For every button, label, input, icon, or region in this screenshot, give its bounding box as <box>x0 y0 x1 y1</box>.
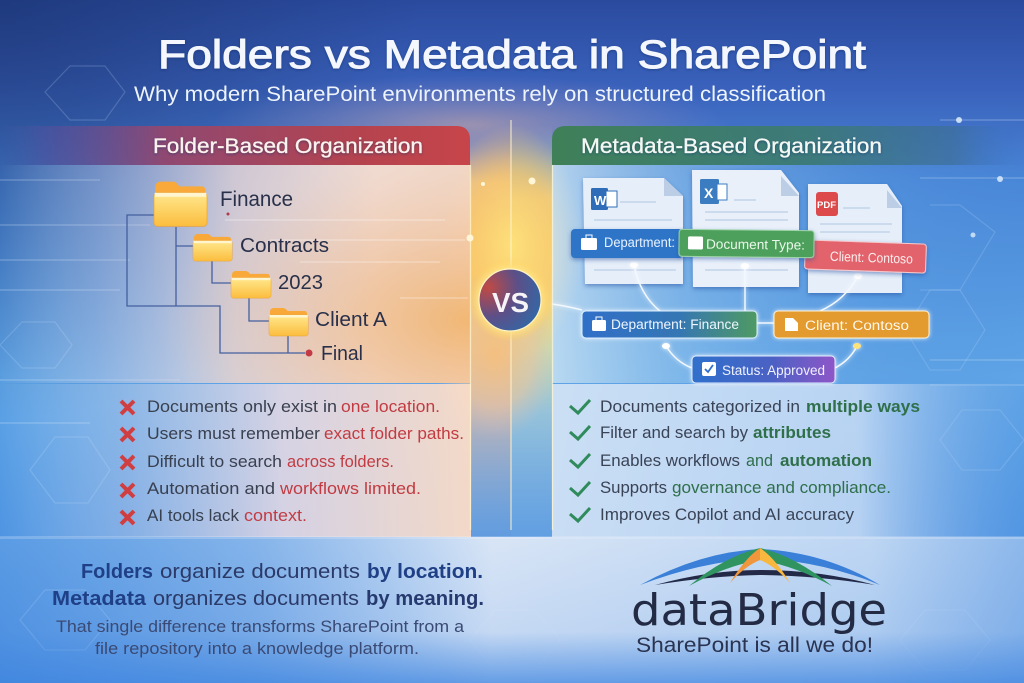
panel body: metadata list <box>552 384 1024 537</box>
tag: department finance: Department: Finance <box>611 317 739 332</box>
logo: tagline: SharePoint is all we do! <box>636 633 873 657</box>
label: finance: Finance <box>220 188 293 211</box>
supporting sentence: That single difference transforms SharePoint from a <box>56 617 465 636</box>
panel body: folder upper <box>0 165 470 383</box>
vs badge: VS <box>492 287 529 318</box>
line: folders by location: Folders <box>81 560 153 583</box>
document: pdf: PDF <box>817 200 836 211</box>
row 5: context. <box>244 506 307 525</box>
tag: status approved <box>692 356 835 383</box>
panel header bar: folder <box>0 126 470 165</box>
tag: client contoso orange: Client: Contoso <box>805 318 909 333</box>
document: pdf <box>808 184 902 293</box>
vs badge <box>468 258 552 342</box>
tag: client contoso red: Client: Contoso <box>830 249 913 267</box>
metadata benefits list <box>570 398 920 524</box>
subtitle: Why modern SharePoint environments rely on structured classification <box>134 82 826 106</box>
document: excel <box>692 170 799 287</box>
line: metadata by meaning: by meaning. <box>366 587 484 610</box>
row 3: and <box>746 452 773 470</box>
glow lower <box>433 270 557 440</box>
label: contracts: Contracts <box>240 235 329 257</box>
panel streaks <box>225 220 468 298</box>
row 3: automation <box>780 452 872 470</box>
row 1 <box>600 398 920 416</box>
supporting sentence: file repository into a knowledge platform. <box>95 639 419 658</box>
panel: metadata-based organization <box>552 126 1024 537</box>
bottom band <box>0 536 1024 683</box>
row 5: AI tools lack <box>147 506 239 525</box>
tag: document type green <box>679 229 814 258</box>
row 3: across folders. <box>287 452 394 471</box>
tag: department blue: Department: <box>604 235 675 250</box>
logo: bridge arcs <box>640 548 880 586</box>
folder tree <box>127 182 388 365</box>
tag: department finance <box>582 311 757 338</box>
tag: client contoso orange <box>774 311 929 338</box>
tag: status approved: Status: Approved <box>722 363 825 378</box>
row 2: Users must remember <box>147 424 320 443</box>
line: metadata by meaning <box>52 587 484 610</box>
logo: wordmark: dataBridge <box>631 585 887 636</box>
line: folders by location: by location. <box>367 560 483 583</box>
panel: folder-based organization <box>12 126 471 537</box>
row 5: Improves Copilot and AI accuracy <box>600 506 855 524</box>
folder drawbacks list <box>121 397 464 525</box>
row 4 <box>147 479 421 498</box>
row 1: multiple ways <box>806 398 920 416</box>
row 1: Documents only exist in <box>147 397 337 416</box>
label: final: Final <box>321 343 363 365</box>
row 1: Documents categorized in <box>600 398 800 416</box>
glow strip: left of divider <box>470 125 511 537</box>
databridge logo <box>631 548 887 657</box>
row 2: Filter and search by <box>600 424 749 442</box>
row 4: Automation and <box>147 479 275 498</box>
icon: client a folder <box>269 308 308 336</box>
center divider and panel edges <box>470 120 552 530</box>
row 4: Supports <box>600 479 667 497</box>
supporting sentence <box>56 617 465 658</box>
crosses <box>121 401 134 524</box>
tag: department blue <box>571 229 683 258</box>
connector nodes <box>630 262 862 349</box>
label: 2023: 2023 <box>278 272 323 294</box>
sparkles <box>466 178 536 242</box>
icon: contracts folder <box>193 234 232 261</box>
row 2: exact folder paths. <box>324 424 464 443</box>
row 2 <box>147 424 464 443</box>
row 5 <box>147 506 307 525</box>
marker: small red dot <box>226 212 230 216</box>
panel body: folder list <box>0 384 471 537</box>
row 1: one location. <box>341 397 440 416</box>
row 1 <box>147 397 440 416</box>
line: folders by location <box>81 560 483 583</box>
row 4: workflows limited. <box>279 479 421 498</box>
row 2 <box>600 424 831 442</box>
tag: client contoso red <box>805 240 926 273</box>
row 3 <box>147 452 394 471</box>
row 3: Difficult to search <box>147 452 282 471</box>
heading: folder-based: Folder-Based Organization <box>153 134 423 158</box>
key message <box>52 560 484 658</box>
line: folders by location: organize documents <box>160 560 360 583</box>
connector lines <box>552 265 858 368</box>
row 3 <box>600 452 872 470</box>
row 4: governance and compliance. <box>672 479 891 497</box>
glow core <box>439 125 583 365</box>
title: Folders vs Metadata in SharePoint <box>158 33 866 77</box>
document: excel: X <box>704 185 714 201</box>
icon: 2023 folder <box>231 271 271 298</box>
heading: metadata-based: Metadata-Based Organization <box>581 134 882 158</box>
row 3: Enables workflows <box>600 452 740 470</box>
tree connector lines <box>127 215 305 353</box>
document: word: W <box>594 193 607 208</box>
panel body: metadata upper <box>552 165 1024 383</box>
panel tint: folder orange glow <box>209 183 470 383</box>
documents <box>583 170 902 293</box>
check marks <box>570 400 590 521</box>
label: client a: Client A <box>315 309 388 331</box>
glow strip: right of divider <box>511 125 552 537</box>
panel header bar: metadata <box>552 126 1024 165</box>
icon: finance folder <box>154 182 207 226</box>
line: metadata by meaning: organizes documents <box>153 587 359 610</box>
marker: final dot <box>306 350 312 356</box>
row 2: attributes <box>753 424 831 442</box>
document: word <box>583 178 683 284</box>
line: metadata by meaning: Metadata <box>52 587 147 610</box>
tag: document type green: Document Type: <box>706 237 805 253</box>
